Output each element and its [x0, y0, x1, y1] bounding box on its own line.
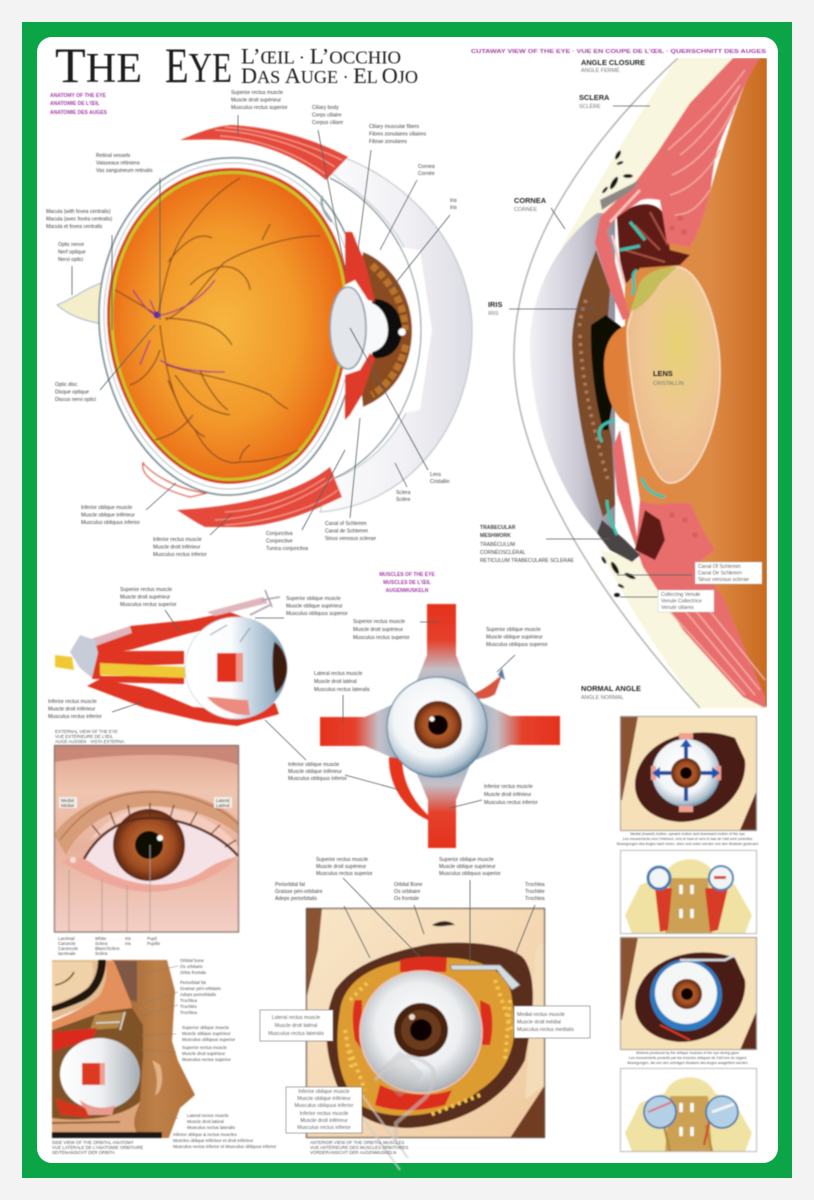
labels: muscles	[48, 587, 548, 808]
caption: anterior orbit: VORDERANSICHT DER AUGENMUSKELN	[310, 1150, 396, 1155]
callout: lateral rectus: Muscle droit latéral	[275, 1023, 317, 1029]
labels: main eye: Tunica conjunctiva	[266, 546, 308, 552]
labels: main eye: Corps ciliaire	[312, 112, 342, 118]
labels: nose view: Lateral rectus muscle	[187, 1113, 229, 1118]
labels: nose view: Muscle droit latéral	[187, 1119, 224, 1124]
labels: muscles: Musculus obliquus inferior	[288, 776, 347, 782]
labels: muscles: Muscle droit inférieur	[48, 706, 96, 712]
labels: external eye: Pupille	[147, 941, 161, 946]
callout: lateral rectus: Musculus rectus lateralis	[268, 1031, 324, 1037]
labels: nose view: Musculus rectus inferior et Musculus obliquus inferior	[173, 1144, 277, 1149]
orbit cavity	[326, 943, 533, 1128]
labels: nose view: Periorbital fat	[180, 980, 207, 985]
callout: lateral rectus	[260, 1010, 333, 1041]
labels: anterior orbit: Superior oblique muscle	[439, 857, 494, 863]
labels: cutaway: MESHWORK	[480, 533, 511, 539]
labels: main eye: Disque optique	[55, 390, 89, 396]
cream sclera	[560, 58, 732, 250]
labels: cutaway: NORMAL ANGLE	[581, 684, 641, 693]
labels: muscles: Inferior rectus muscle	[48, 699, 97, 705]
heading: cutaway view: CUTAWAY VIEW OF THE EYE · VUE EN COUPE DE L’ŒIL · QUERSCHNITT DES AUGES	[471, 49, 767, 55]
title: THE	[55, 37, 142, 93]
sclera outline through limbus	[330, 178, 421, 478]
callout: canal of Schlemm: Canal Of Schlemm	[698, 564, 741, 570]
callout: collecting venule	[658, 590, 714, 612]
labels: main eye: Muscle oblique inférieur	[81, 512, 135, 518]
labels: main eye: Lens	[430, 472, 441, 478]
iris and lens	[322, 196, 432, 425]
caption: blue muscles panel: Motions produced by the oblique muscles of the eye during gaze.	[636, 1051, 740, 1055]
labels: external eye: Latéral	[216, 803, 229, 808]
labels: main eye: Musculus rectus inferior	[153, 552, 207, 558]
labels: nose view: Trochlea	[180, 998, 197, 1003]
labels: anterior orbit: Os frontale	[394, 896, 419, 902]
labels: muscles: Musculus rectus superior	[120, 602, 177, 608]
caption: arrows panel: Les mouvements vers l’intérieur, vers le haut et vers le bas de l’œil sont contrôlés.	[623, 837, 753, 841]
callout: inferior muscles	[286, 1087, 362, 1133]
superior rectus muscle	[180, 125, 348, 180]
caption: blue muscles panel: Les mouvements produits par les muscles obliques de l’œil lors du regard.	[629, 1056, 747, 1060]
labels: nose view: Musculus rectus lateralis	[187, 1125, 236, 1130]
superior oblique tendon	[450, 965, 520, 990]
heading: external eye	[55, 729, 125, 744]
callout: inferior muscles: Inferior rectus muscle	[300, 1111, 349, 1117]
heading: external eye: AUGE AUSSEN · VISTA EXTERNA	[55, 739, 125, 744]
labels: main eye: Corpus ciliare	[312, 120, 343, 126]
labels: nose view: Inferior oblique & rectus muscles	[173, 1132, 237, 1137]
labels: cutaway: IRIS	[488, 300, 502, 309]
labels: cutaway: ANGLE CLOSURE	[581, 58, 645, 67]
labels: external eye: Lacrimal	[58, 936, 75, 941]
pale superior oblique tendon	[88, 597, 268, 648]
labels: main eye: Vas sanguineum retinalis	[96, 168, 153, 174]
labels: cutaway: CRISTALLIN	[653, 381, 684, 387]
inferior oblique	[389, 757, 428, 820]
labels: main eye: Muscle droit supérieur	[231, 98, 281, 104]
labels: main eye: Sclera	[396, 490, 411, 496]
labels: main eye: Inferior rectus muscle	[153, 537, 202, 543]
callout: medial rectus: Musculus rectus medialis	[517, 1027, 574, 1033]
labels: nose view: Muscle droit supérieur	[182, 1051, 226, 1056]
heading: muscles of the eye: MUSCLES OF THE EYE	[379, 572, 435, 578]
callout: inferior muscles: Inferior oblique muscle	[298, 1089, 350, 1095]
labels: muscles: Inferior oblique muscle	[288, 762, 339, 768]
labels: main eye: Superior rectus muscle	[231, 90, 283, 96]
labels: anterior orbit: Periorbital fat	[275, 882, 306, 888]
labels: nose view: Orbis frontale	[180, 970, 207, 975]
labels: cutaway: LENS	[653, 369, 673, 378]
callout: inferior muscles: Muscle droit inférieur	[300, 1118, 348, 1124]
labels: main eye: Optic nerve	[58, 242, 84, 248]
labels: muscles: Musculus obliquus superior	[286, 611, 348, 617]
labels: muscles: Muscle oblique inférieur	[288, 769, 342, 775]
labels: main eye: Fibrae zonulares	[369, 139, 407, 145]
labels: muscles: Superior rectus muscle	[353, 619, 405, 625]
labels: main eye: Retinal vessels	[96, 153, 131, 159]
labels: muscles: Superior oblique muscle	[486, 627, 541, 633]
callout: medial rectus	[514, 1006, 590, 1038]
yellow optic nerve	[55, 655, 187, 678]
globe wall layers	[99, 158, 360, 495]
labels: main eye: Vaisseaux rétiniens	[96, 160, 140, 166]
dark ciliary cavity	[617, 204, 690, 285]
labels: main eye: Cornea	[418, 164, 435, 170]
inferior muscles	[143, 463, 342, 527]
heading: muscles of the eye: AUGENMUSKELN	[386, 588, 429, 594]
labels: nose view: Graisse péri-orbitaire	[180, 986, 222, 991]
labels: muscles: Musculus obliquus superior	[486, 642, 548, 648]
labels: anterior orbit: Muscle oblique supérieur	[439, 864, 496, 870]
labels: muscles: Musculus rectus inferior	[48, 714, 102, 720]
nose profile	[100, 960, 195, 1140]
callout: inferior muscles: Musculus obliquus inferior	[295, 1103, 354, 1109]
orange vitreous body	[625, 58, 767, 708]
labels: muscles: Superior oblique muscle	[286, 596, 341, 602]
labels: cutaway: IRIS	[488, 311, 499, 317]
labels: external eye: Medial	[61, 798, 74, 803]
labels: external eye: Blanc/Sclère	[95, 946, 120, 951]
labels: main eye	[46, 90, 457, 558]
labels: main eye: Macula (avec fovéa centralis)	[46, 216, 113, 222]
labels: external eye: Caroncule	[58, 946, 79, 951]
labels: nose view: Trochlea	[180, 1010, 197, 1015]
lash line	[84, 818, 238, 859]
outflow channels	[601, 150, 636, 597]
labels: muscles: Inferior rectus muscle	[484, 784, 533, 790]
cornea and conjunctiva crescent	[300, 146, 472, 512]
labels: muscles: Superior rectus muscle	[120, 587, 172, 593]
labels: external eye: Lateral	[216, 798, 229, 803]
labels: cutaway	[480, 58, 692, 701]
labels: cutaway: ANGLE NORMAL	[581, 695, 624, 701]
upper lid crease	[54, 790, 239, 855]
title: L’ŒIL · L’OCCHIO	[241, 44, 401, 68]
panel: sagittal nose view	[52, 960, 195, 1140]
labels: main eye: Ciliary muscular fibers	[369, 124, 420, 130]
panel: eye with blue muscles	[620, 937, 757, 1050]
globe	[360, 971, 482, 1093]
labels: cutaway: CORNÉE	[514, 206, 537, 213]
panel: skull top view 2	[620, 1068, 757, 1152]
iris	[113, 809, 185, 881]
callout: canal of Schlemm: Sinus venosus sclerae	[698, 577, 749, 583]
labels: anterior orbit: Adeps periorbitalis	[275, 896, 317, 902]
labels: nose view: Superior rectus muscle	[182, 1045, 227, 1050]
labels: muscles: Muscle oblique supérieur	[486, 634, 543, 640]
labels: external eye: White	[95, 936, 107, 941]
labels: muscles: Musculus rectus lateralis	[314, 687, 370, 693]
labels: muscles: Lateral rectus muscle	[314, 671, 363, 677]
labels: cutaway: CORNEA	[514, 196, 547, 205]
labels: nose view: Orbital bone	[180, 958, 204, 963]
labels: external eye: Iris	[125, 936, 132, 941]
labels: main eye: Discus nervi optici	[55, 397, 96, 403]
labels: nose view: Muscle oblique supérieur	[182, 1031, 231, 1036]
eyeball	[185, 617, 287, 719]
labels: anterior orbit: Trochlea	[525, 882, 545, 888]
labels: anterior orbit: Trochlea	[525, 896, 545, 902]
heading: anatomy of the eye: ANATOMY OF THE EYE	[50, 93, 107, 99]
labels: main eye: Muscle droit inférieur	[153, 544, 201, 550]
labels: anterior orbit: Graisse péri-orbitaire	[275, 889, 323, 895]
labels: main eye: Cornée	[418, 171, 435, 177]
labels: anterior orbit: Os orbitaire	[394, 889, 420, 895]
labels: cutaway: SCLÈRE	[579, 103, 601, 110]
caption: anterior orbit: ANTERIOR VIEW OF THE ORBITAL MUSCLES	[310, 1140, 404, 1145]
globe	[387, 677, 487, 777]
labels: main eye: Nerf optique	[58, 250, 86, 256]
cutaway view of the eye	[514, 58, 768, 708]
callout: collecting venule: Venule Collectrice	[661, 598, 702, 604]
trabecular meshwork	[597, 520, 640, 562]
superior oblique	[470, 675, 502, 699]
labels: main eye: Musculus obliquus inferior	[81, 520, 140, 526]
lower lid	[51, 1102, 140, 1134]
labels: nose view	[52, 958, 277, 1155]
retinal vessels	[115, 178, 320, 463]
panel: external eye photo	[54, 745, 239, 932]
labels: main eye: Sclère	[396, 497, 411, 503]
labels: main eye: Ciliary body	[312, 105, 339, 111]
labels: anterior orbit: Orbital Bone	[394, 882, 422, 888]
labels: main eye: Macula (with fovea centralis)	[46, 209, 111, 215]
labels: nose view: Musculus rectus superior	[182, 1057, 231, 1062]
heading: anatomy of the eye: ANATOMIE DE L’ŒIL	[50, 101, 100, 107]
labels: main eye: Conjonctive	[266, 538, 293, 544]
caption: arrows panel: Medial (inward) motion, upward motion and downward motion of the eye.	[630, 832, 746, 836]
labels: cutaway: CORNÉOSCLÉRAL	[480, 549, 526, 556]
heading: muscles of the eye	[379, 572, 435, 594]
labels: main eye: Canal de Schlemm	[325, 528, 368, 534]
inferior rectus	[87, 679, 279, 726]
callout: collecting venule: Venule ciliares	[661, 605, 694, 611]
superior rectus	[83, 612, 250, 656]
labels: main eye: Macula et fovea centralis	[46, 224, 103, 230]
heading: anatomy of the eye	[50, 93, 108, 116]
labels: muscles: Muscle droit latéral	[314, 679, 357, 685]
globe	[60, 1038, 140, 1110]
rectus muscles	[400, 957, 447, 972]
callout: medial rectus: Muscle droit médial	[517, 1020, 561, 1026]
labels: main eye: Inferior oblique muscle	[81, 505, 132, 511]
labels: nose view: Adeps periorbitalis	[180, 992, 217, 997]
labels: external eye	[58, 798, 229, 956]
brow shadow	[54, 745, 239, 765]
labels: cutaway: SCLERA	[579, 93, 610, 102]
title	[55, 37, 418, 93]
labels: nose view: SEITENANSICHT DER ORBITA	[52, 1150, 115, 1155]
callout: canal of Schlemm: Canal De Schlemm	[698, 570, 742, 576]
labels: muscles: Muscle droit inférieur	[484, 792, 532, 798]
sclera	[84, 818, 238, 886]
panel: skull top view 1	[620, 850, 757, 934]
labels: main eye: Musculus rectus superior	[231, 105, 288, 111]
labels: anterior orbit: Superior rectus muscle	[316, 857, 368, 863]
labels: muscles: Musculus rectus superior	[353, 635, 410, 641]
labels: muscles: Muscle droit supérieur	[353, 627, 403, 633]
labels: external eye: Caruncle	[58, 941, 76, 946]
front view of eye with four rectus muscles	[320, 604, 560, 848]
lens	[627, 267, 720, 483]
caption: anterior orbit	[310, 1140, 409, 1155]
labels: nose view: Superior oblique muscle	[182, 1025, 230, 1030]
labels: nose view: Os orbitaire	[180, 964, 203, 969]
labels: cutaway: TRABÉCULUM	[480, 541, 515, 548]
labels: anterior orbit: Musculus obliquus superior	[439, 871, 501, 877]
caption: arrows panel: Bewegungen des Auges nach innen, oben und unten werden von den Muskeln gesteuert.	[617, 842, 759, 846]
labels: main eye: Optic disc	[55, 382, 78, 388]
title: EYE	[165, 37, 232, 93]
labels: external eye: Sclera	[95, 941, 108, 946]
callout: collecting venule: Collecting Venule	[661, 592, 701, 598]
grey cornea chamber	[530, 213, 615, 533]
aqueous flow arrows	[599, 222, 665, 535]
labels: nose view: Muscles oblique inférieur et droit inférieur	[173, 1138, 254, 1143]
optic disc vessels	[133, 280, 225, 372]
main eye anatomy diagram	[57, 125, 472, 527]
labels: external eye: Scléra	[95, 951, 108, 956]
corneal outer line	[514, 58, 700, 708]
labels: muscles: Muscle droit supérieur	[120, 594, 170, 600]
lower lid	[62, 856, 238, 892]
labels: nose view: VUE LATÉRALE DE L’ANATOMIE ORBITAIRE	[52, 1145, 143, 1150]
side view of eye with muscles	[55, 590, 287, 726]
upper ciliary muscle in pink	[595, 58, 760, 320]
labels: anterior orbit: Musculus rectus superior	[316, 871, 373, 877]
labels: muscles: Musculus rectus inferior	[484, 800, 538, 806]
caption: anterior orbit: VUE ANTÉRIEURE DES MUSCLES ORBITAIRES	[310, 1145, 409, 1150]
labels: muscles: Muscle oblique supérieur	[286, 604, 343, 610]
heading: external eye: EXTERNAL VIEW OF THE EYE	[55, 729, 118, 734]
callout: canal of Schlemm	[695, 562, 762, 584]
callout: inferior muscles: Muscle oblique inférieur	[297, 1096, 351, 1102]
caption: blue muscles panel: Bewegungen, die von den schrägen Muskeln des Auges ausgeführt werden.	[627, 1061, 749, 1065]
labels: nose view: Musculus obliquus superior	[182, 1037, 236, 1042]
heading: muscles of the eye: MUSCLES DE L’ŒIL	[383, 580, 431, 586]
heading: anatomy of the eye: ANATOMIE DES AUGES	[50, 110, 108, 116]
labels: external eye: Pupil	[147, 936, 157, 941]
labels: external eye: Iris	[125, 941, 132, 946]
labels: nose view: Trochlée	[180, 1004, 197, 1009]
labels: cutaway: RETICULUM TRABECULARE SCLERAE	[480, 558, 574, 564]
labels: anterior orbit: Muscle droit supérieur	[316, 864, 366, 870]
orbital fat	[337, 957, 515, 1116]
eyelid	[90, 807, 239, 860]
callout: medial rectus: Medial rectus muscle	[517, 1012, 565, 1018]
title: DAS AUGE · EL OJO	[241, 63, 418, 88]
panel: eye with direction arrows	[620, 716, 757, 831]
labels: main eye: Fibres zonulaires ciliaires	[369, 132, 427, 138]
labels: main eye: Cristallin	[430, 479, 450, 485]
labels: cutaway: TRABECULAR	[480, 525, 516, 531]
lower ciliary and muscle in pink	[613, 430, 765, 708]
labels: external eye: Médial	[61, 803, 74, 808]
brown iris	[572, 250, 615, 517]
callout: inferior muscles: Musculus rectus inferior	[297, 1125, 351, 1131]
labels: main eye: Nervi optici	[58, 257, 83, 263]
labels: anterior orbit	[275, 857, 545, 962]
labels: main eye: Canal of Schlemm	[325, 521, 367, 527]
caption: arrows panel	[617, 832, 759, 846]
callout: lateral rectus: Lateral rectus muscle	[272, 1015, 320, 1021]
skull cross section	[52, 960, 112, 1020]
optic nerve	[57, 282, 108, 325]
panel: anterior orbit view	[306, 908, 545, 1170]
labels: main eye: Sinus venosus sclerae	[325, 536, 376, 542]
labels: anterior orbit: Trochlée	[525, 889, 545, 895]
labels: main eye: Conjunctiva	[266, 531, 293, 537]
labels: nose view: SIDE VIEW OF THE ORBITAL ANATOMY	[52, 1140, 134, 1145]
annulus of Zinn	[70, 635, 98, 678]
caption: blue muscles panel	[627, 1051, 749, 1065]
mid orbital fat and muscle	[52, 1008, 143, 1128]
heading: external eye: VUE EXTÉRIEURE DE L’ŒIL	[55, 734, 114, 739]
watermark	[375, 1050, 434, 1140]
labels: external eye: lacrimale	[58, 951, 76, 956]
labels: cutaway: ANGLE FERMÉ	[581, 67, 620, 74]
labels: main eye: Iris	[450, 205, 457, 211]
labels: main eye: Iris	[450, 198, 457, 204]
lateral rectus	[92, 651, 184, 684]
